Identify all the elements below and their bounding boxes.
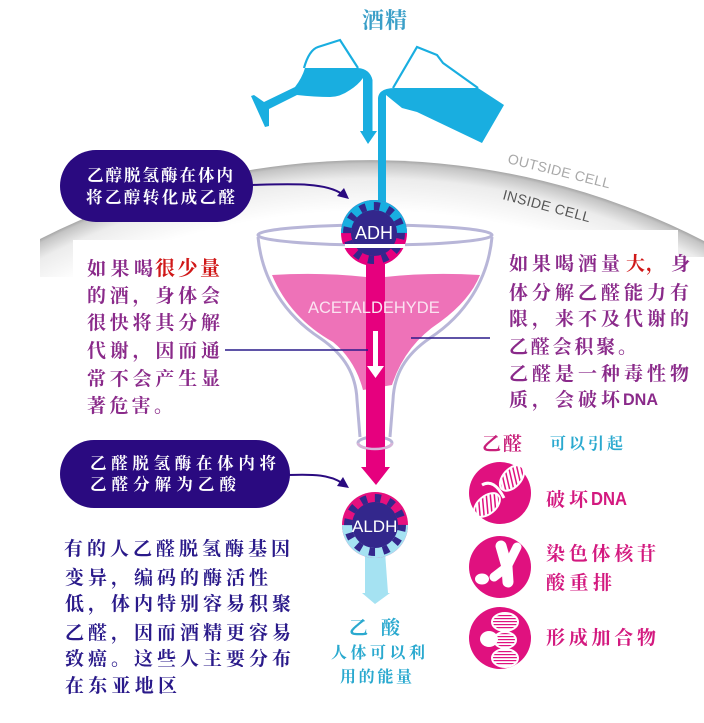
enzyme: ADH (341, 200, 407, 266)
leader line left (225, 349, 368, 351)
text: gene variant: 致癌。这些人主要分布 (65, 647, 291, 670)
heading: acetaldehyde can cause (482, 433, 623, 455)
label: adducts: 形成加合物 (546, 627, 656, 649)
icon: beaker pouring (378, 47, 504, 202)
callout: ADH function: 将乙醇转化成乙醛 (86, 188, 236, 207)
text: gene variant: 在东亚地区 (65, 675, 177, 697)
icon: wine glass pouring (251, 40, 377, 144)
text: large amount: 体分解乙醛能力有 (509, 281, 689, 304)
text: large amount: 质，会破坏 (509, 389, 622, 411)
label: outside cell: OUTSIDE CELL (506, 150, 612, 191)
enzyme: ALDH (342, 492, 408, 604)
text: gene variant: 变异，编码的酶活性 (65, 566, 268, 589)
callout: ALDH function (60, 440, 290, 508)
label: DNA damage: 破坏 (546, 489, 590, 511)
heading: acetaldehyde can cause: 乙醛 (482, 433, 522, 455)
text: small amount: 如果喝 (87, 258, 153, 280)
funnel bottom ring front (358, 443, 392, 449)
text: small amount: 的酒，身体会 (87, 285, 220, 307)
callout: ADH function (60, 150, 253, 222)
text: gene variant: 乙醛，因而酒精更容易 (65, 621, 291, 644)
text: small amount: 代谢，因而通 (87, 340, 220, 362)
text: large amount: DNA (623, 390, 658, 409)
text: acetic acid: 人体可以利 (331, 644, 425, 662)
text: large amount: 身 (671, 253, 690, 275)
magenta stream arrow (361, 262, 390, 485)
icon: adducts (469, 607, 531, 669)
callout: ALDH function: 乙醛脱氢酶在体内将 (90, 453, 276, 473)
white down arrow (367, 331, 384, 378)
label: chromosome rearrangement: 酸重排 (546, 571, 612, 594)
connector: pill two to ALDH (288, 475, 349, 488)
text: large amount (509, 253, 690, 411)
label: DNA damage: DNA (591, 489, 627, 509)
enzyme: ALDH: ALDH (352, 517, 397, 536)
label: DNA damage (546, 489, 627, 511)
label: chromosome rearrangement: 染色体核苷 (546, 542, 656, 565)
text: large amount: 如果喝酒量 (509, 253, 620, 275)
text: large amount: 大 (626, 253, 645, 275)
text: small amount: 著危害。 (87, 394, 173, 417)
text: large amount: ， (646, 254, 665, 275)
connector: pill one to ADH (250, 184, 349, 199)
leader line right (411, 337, 490, 339)
text: small amount (87, 257, 220, 417)
white cell interior (0, 230, 704, 723)
text: small amount: 常不会产生显 (87, 368, 220, 390)
callout: ADH function: 乙醇脱氢酶在体内 (87, 165, 233, 185)
text: large amount: 乙醛会积聚。 (509, 336, 637, 358)
label: inside cell: INSIDE CELL (501, 186, 592, 225)
label: acetaldehyde: ACETALDEHYDE (308, 299, 440, 317)
funnel glass (258, 225, 492, 449)
text: small amount: 很快将其分解 (87, 311, 220, 334)
text: large amount: 限，来不及代谢的 (509, 308, 689, 330)
heading: acetaldehyde can cause: 可以引起 (550, 434, 623, 453)
icon: chromosome (469, 536, 531, 598)
label: chromosome rearrangement (546, 542, 656, 594)
text: acetic acid: 乙酸 (349, 616, 401, 639)
text: large amount: 乙醛是一种毒性物 (509, 363, 689, 385)
text: gene variant: 低，体内特别容易积聚 (65, 592, 291, 615)
enzyme: ADH: ADH (355, 223, 393, 243)
icon: DNA damage (469, 461, 531, 524)
text: acetic acid: 用的能量 (340, 667, 412, 686)
acetaldehyde liquid (272, 274, 480, 390)
callout: ALDH function: 乙醛分解为乙酸 (90, 474, 238, 494)
text: gene variant (64, 538, 291, 697)
text: gene variant: 有的人乙醛脱氢酶基因 (64, 538, 290, 560)
text: acetic acid (331, 616, 425, 686)
cell membrane (40, 160, 704, 290)
title: 酒精 (362, 8, 407, 33)
text: small amount: 很少量 (155, 257, 220, 280)
